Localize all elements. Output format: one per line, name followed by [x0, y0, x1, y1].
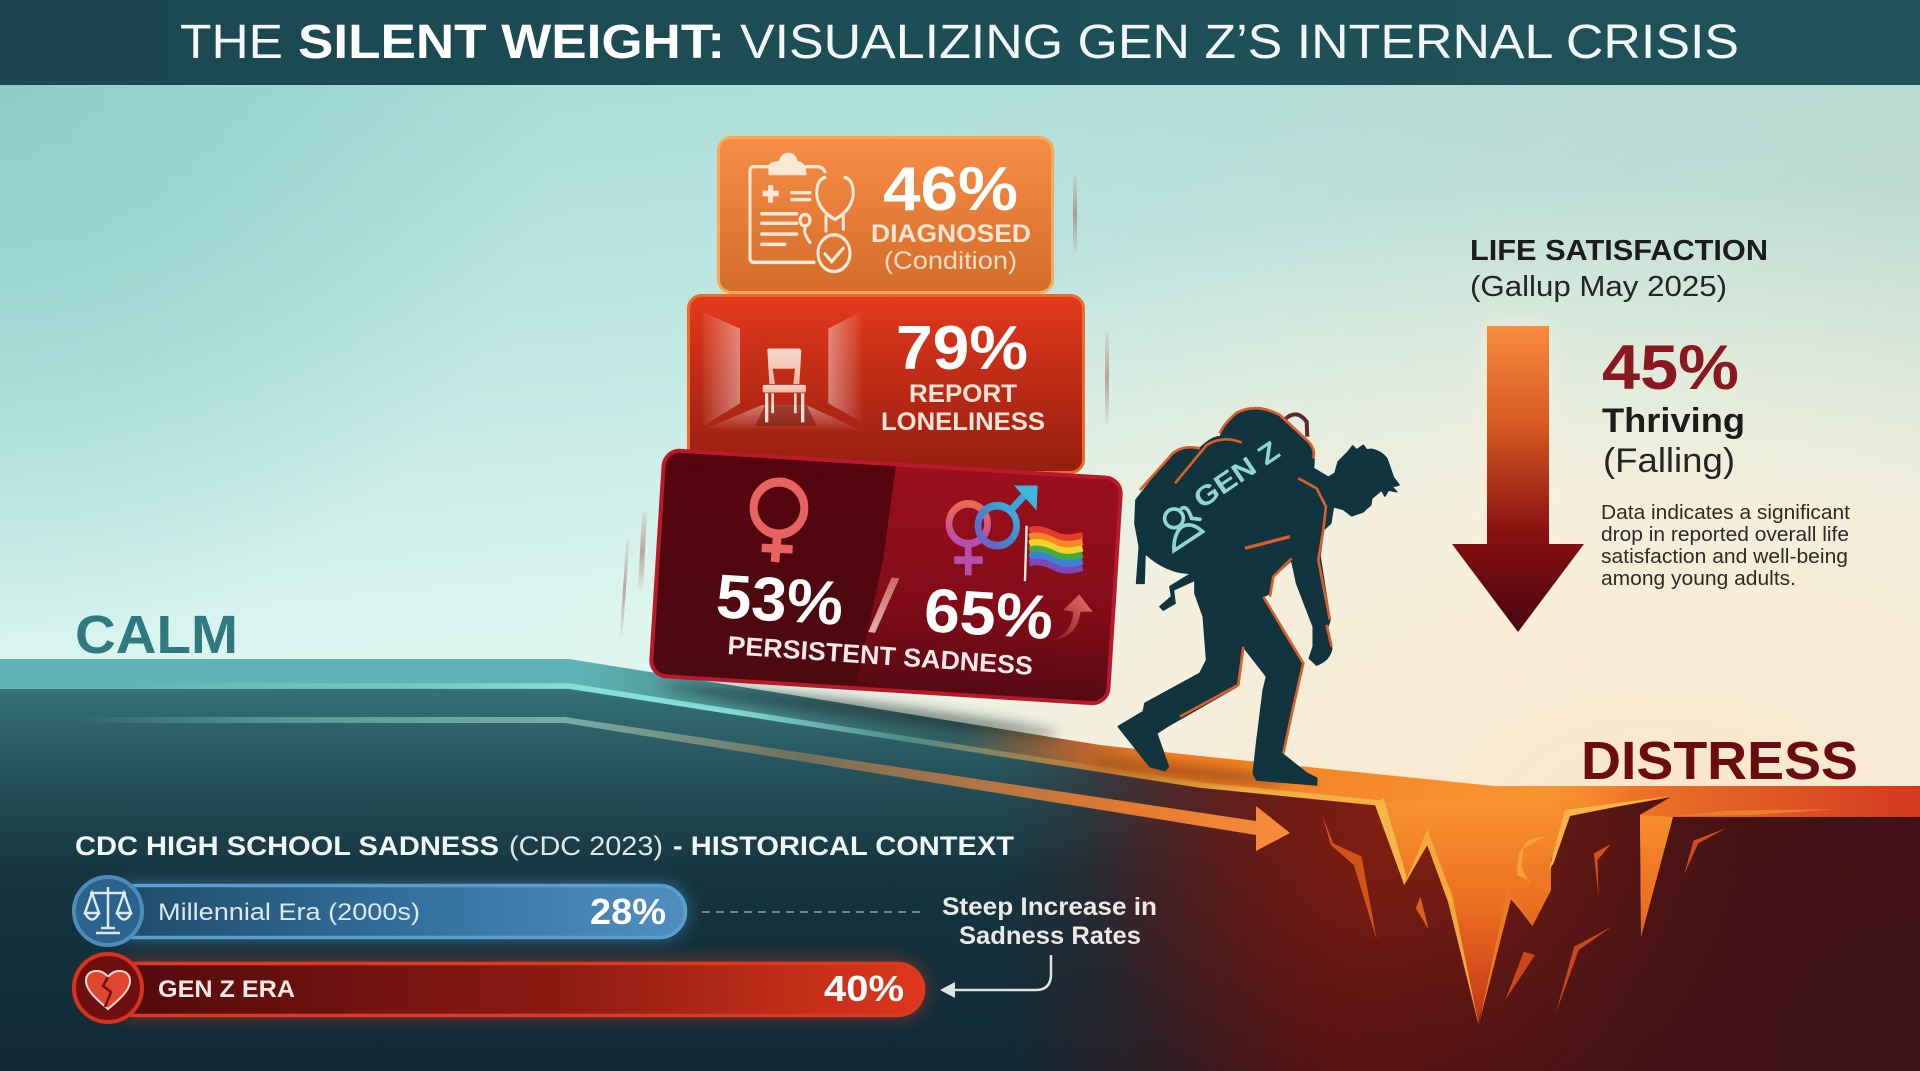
title: THE: [180, 16, 283, 69]
red right edge band: [1540, 786, 1920, 817]
icon: interlocked gender symbols: [949, 485, 1038, 575]
label: calm: CALM: [75, 605, 238, 665]
chasm opening: [1379, 780, 1920, 1023]
callout text: Steep Increase in: [942, 893, 1157, 921]
callout arrow: [940, 955, 1051, 998]
motion ticks around the stack: [620, 175, 1109, 636]
stat 53%: 53%: [714, 562, 845, 639]
source: (Gallup May 2025): [1470, 271, 1727, 303]
icon: rainbow flag: [1025, 526, 1083, 581]
text: condition: (Condition): [884, 247, 1017, 275]
rim highlight stripe: [130, 686, 1379, 803]
stat 79%: 79%: [896, 314, 1028, 383]
panel: 79% loneliness: [688, 296, 1084, 472]
value: 28%: [590, 891, 666, 932]
text: falling: (Falling): [1603, 442, 1735, 480]
text: persistent sadness: PERSISTENT SADNESS: [727, 630, 1034, 681]
icon: scales: [74, 877, 142, 945]
value: 40%: [824, 968, 904, 1009]
ground shadows: [660, 677, 1290, 788]
icon: broken heart: [74, 954, 142, 1022]
icon: female symbol: [754, 482, 804, 562]
text: diagnosed: DIAGNOSED: [871, 220, 1031, 248]
bar: Gen Z era: [74, 954, 925, 1022]
body text: [1601, 502, 1850, 590]
stat 45%: 45%: [1602, 333, 1739, 403]
heading: LIFE SATISFACTION: [1470, 235, 1768, 267]
slash divider: [868, 577, 899, 633]
label: Millennial Era (2000s): [158, 899, 420, 926]
landscape: descending path from calm to chasm: [0, 659, 1920, 1071]
callout text: [942, 893, 1157, 950]
dashed connector: [702, 911, 923, 913]
icon: empty chair in a room: [702, 311, 862, 430]
body text: satisfaction and well-being: [1601, 546, 1848, 568]
body text: among young adults.: [1601, 568, 1796, 590]
icon: falling arrow: [1452, 326, 1584, 632]
heading: (CDC 2023): [509, 831, 663, 861]
panel: 46% diagnosed: [718, 138, 1052, 292]
title: SILENT WEIGHT:: [298, 16, 725, 69]
sloped ground surface: [0, 659, 1540, 803]
label: distress: DISTRESS: [1581, 731, 1858, 791]
heading: - HISTORICAL CONTEXT: [673, 831, 1015, 861]
title: [180, 16, 1739, 69]
silhouette: [1118, 408, 1399, 785]
text: report loneliness: [881, 380, 1045, 436]
title: VISUALIZING GEN Z’S INTERNAL CRISIS: [740, 16, 1739, 69]
body text: Data indicates a significant: [1601, 502, 1850, 524]
chasm lit edges and cracks: [1322, 796, 1834, 1025]
text: report loneliness: LONELINESS: [881, 408, 1045, 436]
trail arrow into chasm: [80, 717, 1290, 851]
body text: drop in reported overall life: [1601, 524, 1849, 546]
stat 65%: 65%: [922, 576, 1055, 653]
backpack handle: [1285, 414, 1307, 437]
panel: CDC historical context: [74, 831, 1157, 1022]
heading: CDC HIGH SCHOOL SADNESS: [75, 831, 499, 861]
stat 46%: 46%: [883, 155, 1018, 224]
bar: millennial era: [74, 877, 687, 945]
header bar: [0, 0, 1920, 85]
icon: rising arrow: [1052, 595, 1093, 640]
panel: life satisfaction: [1452, 235, 1850, 632]
heading: [75, 831, 1015, 861]
callout text: Sadness Rates: [959, 922, 1141, 950]
figure: person carrying Gen Z backpack: [1118, 408, 1399, 785]
icon: clipboard and stethoscope: [750, 154, 853, 272]
text: thriving: Thriving: [1602, 402, 1745, 440]
label: GEN Z ERA: [158, 976, 295, 1003]
orange rim light: [1140, 408, 1332, 753]
backpack people icon: [1165, 508, 1203, 551]
panel: persistent sadness: [650, 450, 1122, 704]
text: report loneliness: REPORT: [909, 380, 1017, 408]
backpack label: GEN Z: [1188, 435, 1285, 514]
